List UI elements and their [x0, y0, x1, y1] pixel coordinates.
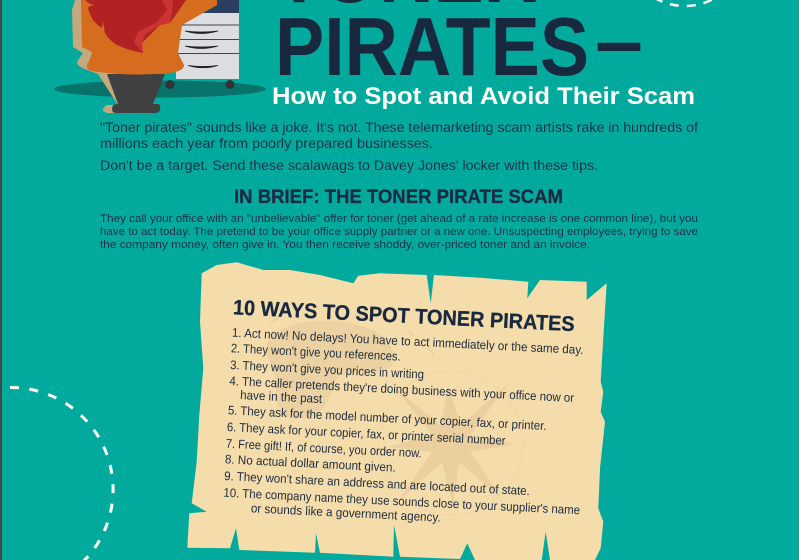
in brief text: the company money, often give in. You then receive shoddy, over-priced toner and an invoice. — [100, 239, 590, 251]
list of ten ways: 9. They won't share an address and are located out of state. — [224, 469, 530, 498]
map blob watermark — [266, 321, 394, 419]
title: PIRATES — [275, 0, 589, 93]
intro text — [100, 120, 698, 173]
map dashed trail watermark — [270, 314, 434, 356]
subtitle: How to Spot and Avoid Their Scam — [272, 83, 695, 110]
list of ten ways: 7. Free gift! If, of course, you order now. — [226, 437, 422, 460]
ground shadow — [54, 80, 266, 98]
intro text: "Toner pirates" sounds like a joke. It's not. These telemarketing scam artists rake in hundreds of — [100, 120, 698, 135]
list of ten ways: 8. No actual dollar amount given. — [225, 452, 396, 475]
in brief text: They call your office with an "unbelievable" offer for toner (get ahead of a rate increase is one common line), but you — [100, 213, 698, 225]
pirate coat — [81, 0, 217, 75]
heading: 10 ways: 10 WAYS TO SPOT TONER PIRATES — [232, 296, 575, 336]
list of ten ways: 1. Act now! No delays! You have to act immediately or the same day. — [232, 326, 584, 357]
in brief text: have to act today. The pretend to be your office supply partner or a new one. Unsuspecting employees, trying to save — [100, 226, 698, 238]
intro text: Don't be a target. Send these scalawags to Davey Jones' locker with these tips. — [100, 158, 598, 173]
dashed route arc: bottom left — [10, 387, 113, 560]
list of ten ways: 3. They won't give you prices in writing — [230, 358, 424, 382]
pirate trousers and boots — [107, 74, 165, 113]
pirate shadow outline — [72, 0, 125, 113]
pirate hair — [85, 0, 186, 53]
dashed route arc: top right — [624, 0, 746, 6]
pirate hair highlight — [134, 0, 173, 53]
compass watermark — [379, 371, 523, 515]
parchment shape — [187, 262, 607, 560]
list of ten ways: 6. They ask for your copier, fax, or printer serial number — [227, 420, 506, 448]
illustration: pirate at copier — [54, 0, 266, 113]
copier — [166, 0, 239, 89]
list of ten ways: or sounds like a government agency. — [251, 501, 441, 525]
list of ten ways: 10. The company name they use sounds close to your supplier's name — [223, 486, 580, 517]
panel: treasure map parchment — [187, 262, 607, 560]
list of ten ways: 5. They ask for the model number of your copier, fax, or printer. — [228, 403, 547, 433]
list of ten ways: 2. They won't give you references. — [231, 341, 401, 364]
in brief text — [100, 213, 698, 251]
list of ten ways: have in the past — [240, 388, 323, 406]
heading: in brief: IN BRIEF: THE TONER PIRATE SCAM — [234, 187, 563, 208]
list of ten ways — [223, 326, 584, 525]
intro text: millions each year from poorly prepared businesses. — [100, 136, 433, 151]
list of ten ways: 4. The caller pretends they're doing business with your office now or — [229, 374, 574, 405]
